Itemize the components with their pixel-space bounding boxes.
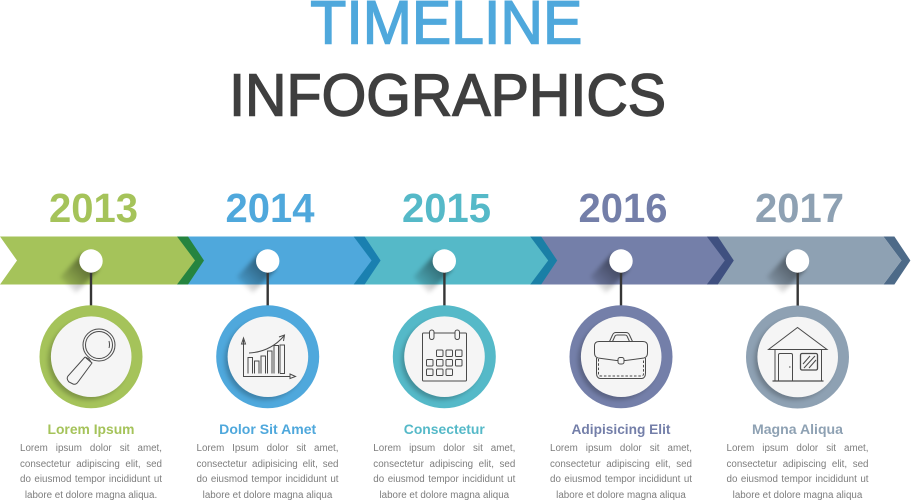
year: 2017 bbox=[755, 185, 844, 231]
icon: house bbox=[768, 328, 827, 381]
year 2015 column bbox=[393, 185, 496, 408]
connector line bbox=[90, 270, 92, 306]
heading 3: Consectetur bbox=[404, 421, 485, 437]
year: 2016 bbox=[578, 185, 668, 231]
text block 1: consectetur adipiscing elit, sed bbox=[20, 459, 162, 470]
text block 3: consectetur adipiscing elit, sed bbox=[373, 459, 515, 470]
icon disc bbox=[757, 317, 838, 397]
pin bbox=[609, 249, 633, 273]
pin shadow bbox=[237, 253, 276, 293]
timeline band bbox=[0, 236, 910, 284]
year: 2013 bbox=[49, 185, 138, 231]
ring inner shadow bbox=[754, 320, 834, 400]
title line: infographics: INFOGRAPHICS bbox=[229, 62, 666, 128]
pin shadow bbox=[766, 253, 806, 293]
text block 5: consectetur adipiscing elit, sed bbox=[726, 459, 868, 470]
icon disc bbox=[51, 316, 132, 397]
pin bbox=[433, 249, 456, 273]
text block 1: do eiusmod tempor incididunt ut bbox=[20, 474, 162, 485]
pin shadow bbox=[590, 253, 629, 293]
heading 5: Magna Aliqua bbox=[752, 421, 843, 437]
icon ring bbox=[216, 305, 319, 408]
arrow 2015 bbox=[353, 236, 557, 284]
text block 3: do eiusmod tempor incididunt ut bbox=[373, 474, 515, 485]
item headings bbox=[48, 421, 843, 437]
icon ring bbox=[570, 305, 672, 408]
text block 5 bbox=[726, 443, 868, 500]
icon disc bbox=[228, 316, 308, 397]
ring inner shadow bbox=[225, 320, 305, 400]
text block 1 bbox=[20, 443, 162, 500]
text block 2 bbox=[196, 443, 338, 500]
text block 5: do eiusmod tempor incididunt ut bbox=[726, 474, 868, 485]
connector line bbox=[620, 270, 622, 306]
text block 4: Lorem ipsum dolor sit amet, bbox=[550, 443, 692, 454]
ring inner shadow bbox=[48, 320, 128, 400]
text block 3 bbox=[373, 443, 516, 500]
text block 1: Lorem ipsum dolor sit amet, bbox=[20, 443, 162, 454]
arrow 2013 bbox=[0, 236, 204, 284]
pin bbox=[79, 249, 103, 273]
icon ring bbox=[746, 306, 849, 408]
heading 4: Adipisicing Elit bbox=[572, 421, 671, 437]
heading 2: Dolor Sit Amet bbox=[219, 421, 317, 437]
icon: calendar bbox=[422, 330, 466, 381]
icon: growth chart bbox=[242, 335, 296, 378]
arrow 2016 bbox=[530, 236, 734, 284]
year: 2015 bbox=[402, 185, 491, 231]
year 2017 column bbox=[746, 185, 849, 408]
text block 4 bbox=[550, 443, 692, 500]
icon disc bbox=[581, 316, 662, 397]
arrow 2017 bbox=[706, 236, 910, 284]
text block 2: Lorem Ipsum dolor sit amet, bbox=[196, 443, 338, 454]
text block 3: Lorem ipsum dolor sit amet, bbox=[373, 443, 515, 454]
title bbox=[229, 0, 666, 129]
pin shadow bbox=[60, 253, 99, 293]
ring inner shadow bbox=[578, 320, 658, 400]
connector line bbox=[796, 270, 799, 306]
text block 4: do eiusmod tempor incididunt ut bbox=[550, 474, 692, 485]
icon: briefcase bbox=[594, 332, 648, 378]
year: 2014 bbox=[226, 185, 315, 231]
year 2014 column bbox=[216, 185, 319, 408]
pin bbox=[786, 249, 809, 273]
icon: magnifying glass bbox=[67, 329, 115, 384]
connector line bbox=[443, 270, 446, 306]
arrow 2014 bbox=[177, 236, 381, 284]
icon ring bbox=[40, 305, 142, 408]
year 2016 column bbox=[570, 185, 672, 408]
pin shadow bbox=[413, 253, 452, 293]
ring inner shadow bbox=[401, 320, 481, 400]
text block 5: Lorem ipsum dolor sit amet, bbox=[726, 443, 868, 454]
text block 4: consectetur adipiscing elit, sed bbox=[550, 459, 692, 470]
text block 2: consectetur adipisicing elit, sed bbox=[196, 459, 338, 470]
year 2013 column bbox=[40, 185, 142, 408]
icon disc bbox=[404, 316, 485, 397]
icon ring bbox=[393, 305, 496, 408]
pin bbox=[256, 249, 279, 273]
heading 1: Lorem Ipsum bbox=[48, 421, 134, 437]
text block 2: do eiusmod tempor incididunt ut bbox=[196, 474, 338, 485]
connector line bbox=[266, 270, 269, 306]
